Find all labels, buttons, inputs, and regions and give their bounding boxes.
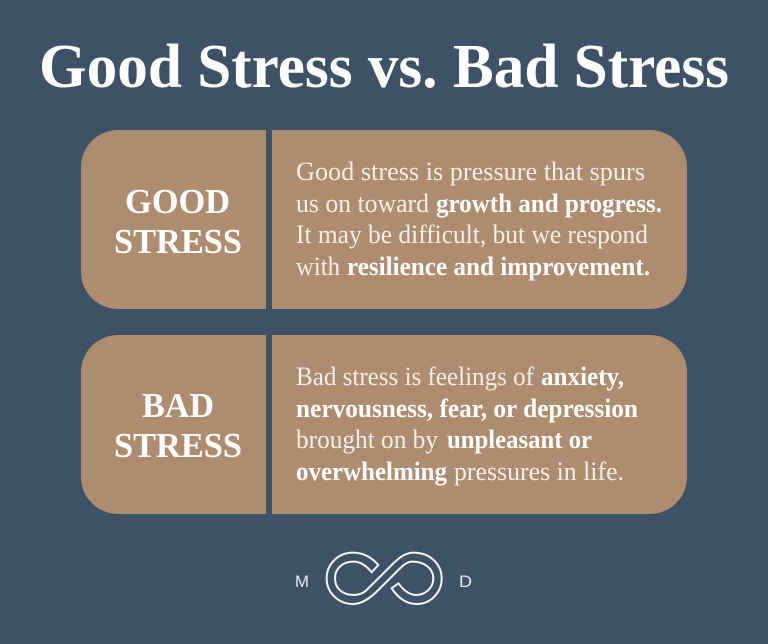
bad stress heading: STRESS: [114, 426, 242, 465]
good stress heading: STRESS: [114, 222, 242, 261]
good stress description: It may be difficult, but we respond: [296, 220, 648, 249]
good stress description: growth and progress.: [436, 189, 662, 218]
bad stress description: anxiety,: [541, 362, 624, 391]
bad stress description: overwhelming: [296, 457, 447, 486]
panel: good stress: [81, 130, 687, 309]
bad stress heading: [114, 386, 242, 465]
good stress description: [296, 157, 662, 281]
good stress description: with: [296, 252, 340, 281]
bad stress description: Bad stress is feelings of: [296, 362, 534, 391]
panel: bad stress: [81, 335, 687, 514]
bad stress description: unpleasant or: [447, 425, 592, 454]
bad stress description: pressures in life.: [454, 457, 624, 486]
logo letter D: D: [459, 572, 472, 591]
logo: [295, 553, 472, 604]
good stress label box: [81, 130, 266, 309]
good stress heading: [114, 182, 242, 261]
bad stress label box: [81, 335, 266, 514]
icon: infinity ribbon: [327, 553, 442, 604]
title: Good Stress vs. Bad Stress: [39, 33, 729, 101]
good stress description: resilience and improvement.: [347, 252, 650, 281]
good stress description: us on toward: [296, 189, 429, 218]
bad stress description box: [272, 335, 687, 514]
bad stress heading: BAD: [142, 386, 214, 425]
good stress description: Good stress is pressure that spurs: [296, 157, 645, 186]
logo letter M: M: [295, 572, 309, 591]
good stress heading: GOOD: [125, 182, 230, 221]
bad stress description: [296, 362, 639, 486]
bad stress description: brought on by: [296, 425, 438, 454]
bad stress description: nervousness, fear, or depression: [296, 394, 639, 423]
good stress description box: [272, 130, 687, 309]
